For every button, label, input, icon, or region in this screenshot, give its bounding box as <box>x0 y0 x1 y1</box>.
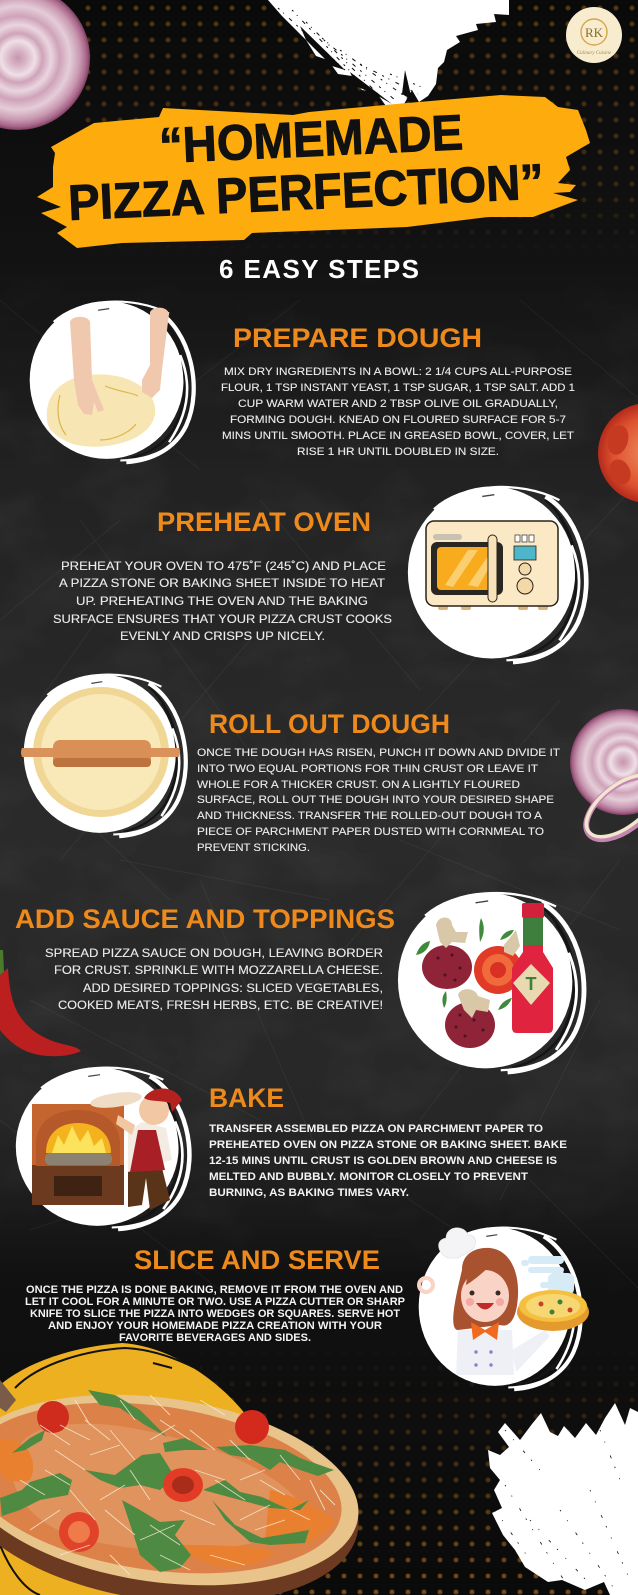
pizza crust <box>0 1371 371 1595</box>
step 4 body text: FOR CRUST. SPRINKLE WITH MOZZARELLA CHEESE. <box>54 965 383 977</box>
step 5 body text <box>209 1123 567 1199</box>
step 6 body text: FAVORITE BEVERAGES AND SIDES. <box>119 1332 311 1344</box>
title line 2: PIZZA PERFECTION” <box>67 153 545 231</box>
arugula leaves <box>0 1390 334 1572</box>
step 3 body text: SURFACE, ROLL OUT THE DOUGH INTO YOUR DESIRED SHAPE <box>197 794 554 806</box>
step 1 body text: MIX DRY INGREDIENTS IN A BOWL: 2 1/4 CUPS ALL-PURPOSE <box>224 366 572 378</box>
subtitle: 6 EASY STEPS <box>219 254 419 284</box>
yellow paint blob <box>0 1343 260 1595</box>
step 2 body text: UP. PREHEATING THE OVEN AND THE BAKING <box>76 596 368 608</box>
step 5 illustration: brick oven and chef <box>16 1067 189 1229</box>
step 1 body text: MINS UNTIL SMOOTH. PLACE IN GREASED BOWL, COVER, LET <box>222 430 574 442</box>
step 1 body text: FLOUR, 1 TSP INSTANT YEAST, 1 TSP SUGAR, 1 TSP SALT. ADD 1 <box>221 382 575 394</box>
panel: step 1 prepare dough <box>30 301 575 462</box>
step 3 body text: INTO TWO EQUAL PORTIONS FOR THIN CRUST OR LEAVE IT <box>197 763 538 775</box>
step 6 heading: SLICE AND SERVE <box>134 1245 380 1275</box>
step 4 body text: COOKED MEATS, FRESH HERBS, ETC. BE CREATIVE! <box>58 1000 383 1012</box>
logo badge <box>566 7 622 63</box>
panel: step 5 bake <box>16 1067 567 1229</box>
step 6 body text: AND ENJOY YOUR HOMEMADE PIZZA CREATION WITH YOUR <box>48 1320 382 1332</box>
step 3 body text: WHOLE FOR A THICKER CRUST. ON A LIGHTLY FLOURED <box>197 779 520 791</box>
orange halftone dots bottom <box>200 1366 634 1594</box>
step 4 heading: ADD SAUCE AND TOPPINGS <box>15 904 395 934</box>
step 4 illustration: salami, tomato, mushrooms and sauce bottle: T <box>526 974 536 994</box>
white brush stroke bottom right <box>488 1403 638 1595</box>
step 5 body text: BURNING, AS BAKING TIMES VARY. <box>209 1187 409 1199</box>
panel: step 6 slice and serve <box>25 1227 589 1389</box>
white brush stroke top <box>268 0 509 106</box>
step 1 body text <box>221 366 575 458</box>
step 5 body text: PREHEATED OVEN ON PIZZA STONE OR BAKING SHEET. BAKE <box>209 1139 567 1151</box>
step 1 heading: PREPARE DOUGH <box>233 323 482 353</box>
step 1 body text: RISE 1 HR UNTIL DOUBLED IN SIZE. <box>297 446 499 458</box>
step 2 body text: A PIZZA STONE OR BAKING SHEET INSIDE TO HEAT <box>59 578 385 590</box>
logo badge: Culinary Cuisine <box>577 51 612 56</box>
step 1 illustration: hands kneading dough <box>30 301 194 462</box>
red onion slice top left <box>0 0 90 130</box>
pizza photo with yellow backdrop <box>0 1343 372 1595</box>
step 6 body text: LET IT COOL FOR A MINUTE OR TWO. USE A PIZZA CUTTER OR SHARP <box>25 1296 405 1308</box>
step 6 body text: ONCE THE PIZZA IS DONE BAKING, REMOVE IT FROM THE OVEN AND <box>26 1284 403 1296</box>
logo badge: RK <box>585 25 604 40</box>
step 3 body text: PREVENT STICKING. <box>197 842 310 854</box>
step 6 body text: KNIFE TO SLICE THE PIZZA INTO WEDGES OR SQUARES. SERVE HOT <box>30 1308 400 1320</box>
step 5 body text: 12-15 MINS UNTIL CRUST IS GOLDEN BROWN AND CHEESE IS <box>209 1155 557 1167</box>
step 4 illustration: salami, tomato, mushrooms and sauce bottle <box>398 893 584 1072</box>
step 3 body text: AND THICKNESS. TRANSFER THE ROLLED-OUT DOUGH TO A <box>197 810 543 822</box>
wooden board <box>0 1377 372 1595</box>
step 4 body text: ADD DESIRED TOPPINGS: SLICED VEGETABLES, <box>83 983 383 995</box>
step 3 body text: ONCE THE DOUGH HAS RISEN, PUNCH IT DOWN AND DIVIDE IT <box>197 747 560 759</box>
step 3 body text: PIECE OF PARCHMENT PAPER DUSTED WITH CORNMEAL TO <box>197 826 544 838</box>
step 2 illustration: microwave oven <box>408 487 586 662</box>
step 2 body text: SURFACE ENSURES THAT YOUR PIZZA CRUST COOKS <box>53 614 392 626</box>
step 1 body text: CUP WARM WATER AND 2 TBSP OLIVE OIL GRADUALLY, <box>238 398 558 410</box>
panel: step 3 roll out dough <box>21 674 560 854</box>
red chili pepper left edge <box>0 950 81 1056</box>
pizza server handle <box>0 1380 16 1412</box>
step 5 body text: MELTED AND BUBBLY. MONITOR CLOSELY TO PREVENT <box>209 1171 528 1183</box>
step 1 body text: FORMING DOUGH. KNEAD ON FLOURED SURFACE FOR 5-7 <box>230 414 566 426</box>
step 4 body text: SPREAD PIZZA SAUCE ON DOUGH, LEAVING BORDER <box>45 948 383 960</box>
cherry tomatoes and slices <box>37 1401 69 1433</box>
step 3 heading: ROLL OUT DOUGH <box>209 709 450 739</box>
grated cheese <box>20 1395 335 1575</box>
title banner <box>37 95 590 248</box>
orange halftone dots top <box>86 6 634 234</box>
step 6 body text <box>25 1284 405 1344</box>
panel: step 2 preheat oven <box>53 487 586 662</box>
red onion slice and ring right edge <box>570 709 638 851</box>
step 3 illustration: rolling pin on dough <box>21 674 186 836</box>
panel: step 4 sauce and toppings <box>15 893 584 1072</box>
step 4 body text <box>45 948 383 1012</box>
step 5 body text: TRANSFER ASSEMBLED PIZZA ON PARCHMENT PAPER TO <box>209 1123 543 1135</box>
step 2 body text: PREHEAT YOUR OVEN TO 475˚F (245˚C) AND PLACE <box>61 561 386 573</box>
pizza sauce and cheese <box>0 1381 353 1595</box>
step 2 body text <box>53 561 392 643</box>
step 5 heading: BAKE <box>209 1083 284 1113</box>
step 2 heading: PREHEAT OVEN <box>157 507 371 537</box>
step 6 illustration: female chef holding pizza <box>419 1227 589 1389</box>
tomato slice right edge <box>598 403 638 503</box>
title line 1: “HOMEMADE <box>158 104 464 174</box>
step 3 body text <box>197 747 560 854</box>
step 2 body text: EVENLY AND CRISPS UP NICELY. <box>120 631 325 643</box>
